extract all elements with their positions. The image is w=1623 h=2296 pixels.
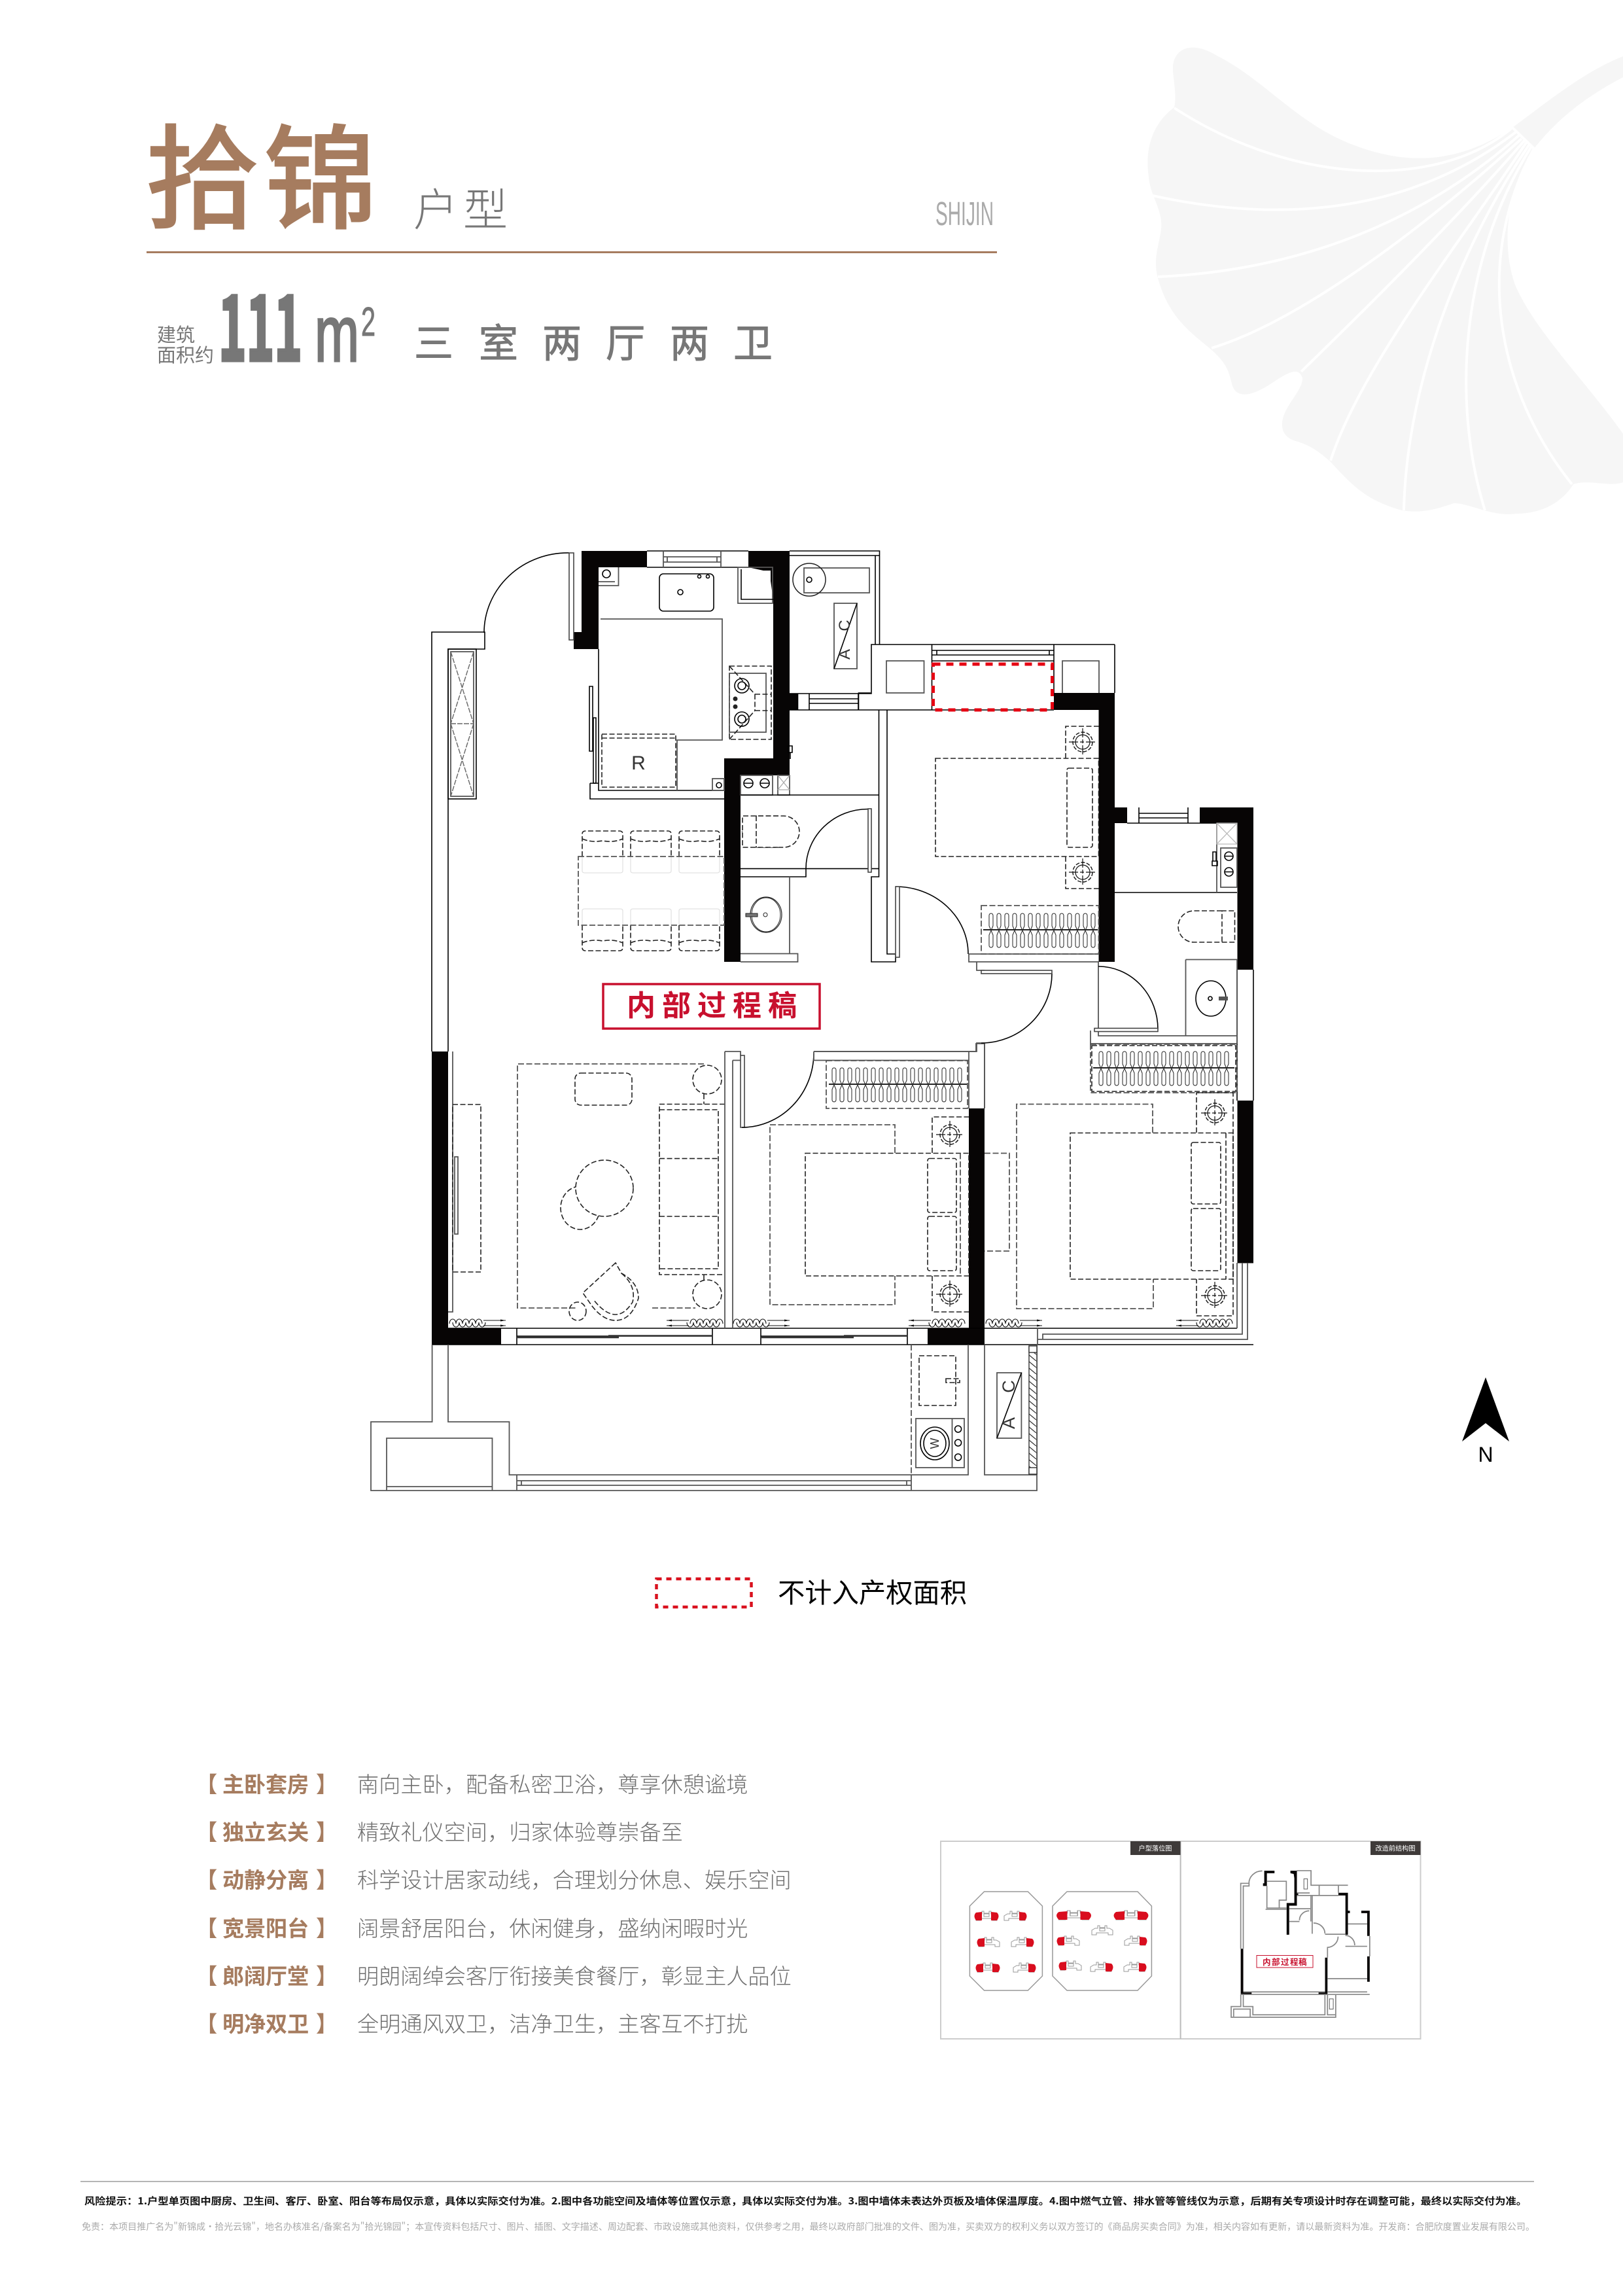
bedroom partition and door [725,1044,985,1328]
master bed [985,1093,1248,1345]
south AC platform: A [999,1417,1019,1429]
south AC platform: C [999,1380,1019,1393]
site plan tab [1130,1841,1180,1855]
ensuite bathroom [1091,807,1237,1044]
structure plan tab: 改造前结构图 [1375,1843,1416,1853]
area value: 2 [361,300,375,345]
disclaimer: 免责：本项目推广名为"新锦成·拾光云锦"，地名办核准名/备案名为"拾光锦园"；本宣传资料包括尺寸、图片、插图、文字描述、周边配套、市政设施或其他资料，仅供参考之用，最终以政府部门批准的文件、图为准，买卖双方的权利义务以双方签订的《商品房买卖合同》为准，相关内容如有更新，请以最新资料为准。开发商：合肥欣度置业发展有限公司。 [82,2220,1535,2233]
feature row: hall: 【郎阔厅堂】 [196,1958,338,1990]
south balcony [371,1345,1037,1491]
curtains [449,1319,1232,1327]
south AC platform [997,1346,1037,1474]
living room furniture [448,1051,725,1320]
feature list [196,1767,792,2038]
laundry area [916,1356,964,1468]
feature row: foyer: 精致礼仪空间，归家体验尊崇备至 [357,1814,683,1846]
structure plan tab [1370,1841,1421,1855]
guest bathroom [741,710,896,962]
room count: 三室两厅两卫 [414,312,773,369]
feature row: master suite: 南向主卧，配备私密卫浴，尊享休憩谧境 [357,1767,748,1799]
feature row: balcony: 【宽景阳台】 [196,1911,338,1943]
area label: 面积约 [157,340,214,368]
english name: SHIJIN [935,195,994,232]
fridge: R [631,752,646,774]
site plan tab: 户型落位图 [1139,1843,1172,1853]
main bedroom north [896,726,1099,970]
feature row: bathrooms: 【明净双卫】 [196,2006,338,2038]
feature row: hall: 明朗阔绰会客厅衔接美食餐厅，彰显主人品位 [357,1958,792,1990]
risk notice: 风险提示：1.户型单页图中厨房、卫生间、客厅、卧室、阳台等布局仅示意，具体以实际交付为准。2.图中各功能空间及墙体等位置仅示意，具体以实际交付为准。3.图中墙体未表达外页板及墙体保温厚度。4.图中燃气立管、排水管等管线仅为示意，后期有关专项设计时存在调整可能，最终以实际交付为准。 [84,2194,1527,2208]
AC balcony [790,563,1115,710]
area value: m [315,289,359,378]
laundry area: W [928,1438,941,1449]
dining table and chairs [578,831,724,951]
feature row: balcony: 阔景舒居阳台，休闲健身，盛纳闲暇时光 [357,1911,748,1943]
footer rule [80,2181,1534,2182]
hall door [814,970,1052,1108]
non-property area red dashed box [933,664,1052,710]
legend: non-property area: 不计入产权面积 [778,1571,967,1610]
feature row: zoning: 【动静分离】 [196,1862,338,1894]
shoe cabinet [448,649,476,799]
internal draft stamp: 内部过程稿 [627,982,797,1024]
title rule [147,251,997,253]
feature row: foyer: 【独立玄关】 [196,1814,338,1846]
decorative ginkgo leaf [1147,48,1623,514]
AC balcony: C [836,620,854,631]
area label: 建筑 [157,320,195,347]
feature row: bathrooms: 全明通风双卫，洁净卫生，主客互不打扰 [357,2006,748,2038]
feature row: zoning: 科学设计居家动线，合理划分休息、娱乐空间 [357,1862,792,1894]
AC balcony: A [836,649,854,660]
structural walls [432,551,1253,1345]
subtitle: unit type: 户型 [413,174,508,239]
fridge [602,734,676,787]
floor plan [371,551,1253,1491]
mini floor plan: 内部过程稿 [1263,1955,1307,1968]
icon: north arrow [1462,1377,1509,1466]
entry door [484,553,574,640]
site plan map [969,1892,1151,1990]
title: project name: 拾锦 [146,88,377,252]
area label [157,320,214,368]
legend: non-property area [657,1571,967,1610]
area value: 111 [218,259,302,386]
bedroom 2 bed [770,1117,969,1312]
master bedroom wardrobe [1091,1044,1237,1093]
feature row: master suite: 【主卧套房】 [196,1767,338,1799]
mini floor plan [1231,1871,1370,2017]
inset panel [941,1841,1421,2039]
outer shell lines [432,551,1253,1345]
kitchen [589,551,773,790]
gas stove [729,666,771,739]
ducts by kitchen [712,746,792,795]
icon: north arrow: N [1478,1443,1493,1466]
sliding windows [517,1328,907,1345]
bedroom 2 wardrobe [826,1061,968,1108]
north balcony [858,645,1115,710]
feature row: foyer [196,1814,683,1846]
